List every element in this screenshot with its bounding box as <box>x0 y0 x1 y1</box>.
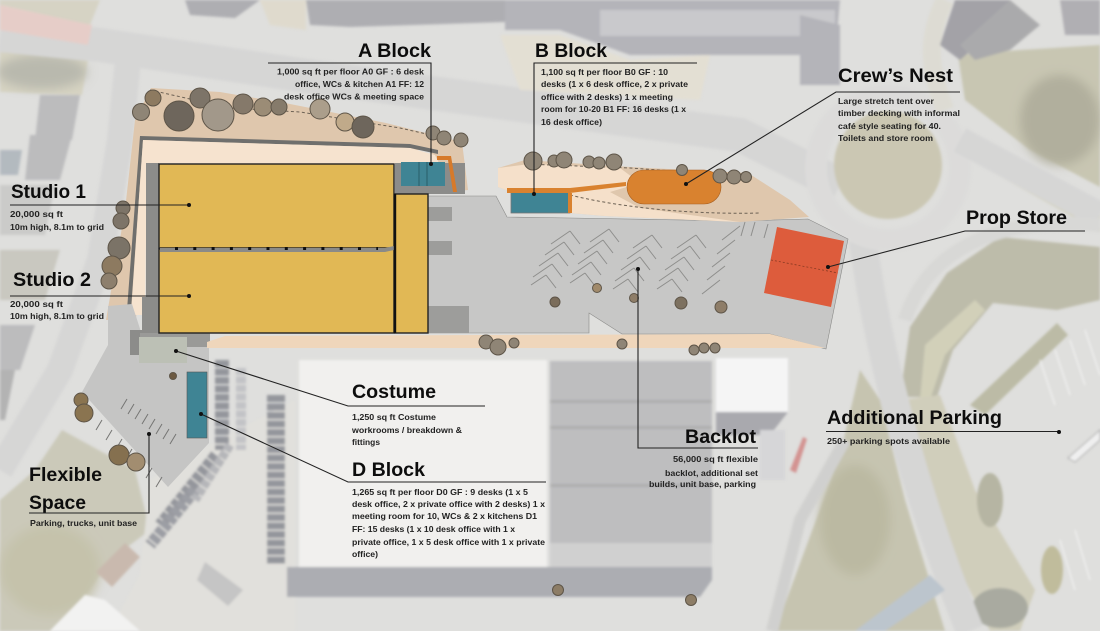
landscape north tan band <box>135 88 468 192</box>
label: Backlot: 56,000 sq ft flexible <box>673 455 758 464</box>
aerial: west car park rows <box>150 360 276 565</box>
aerial: white warehouse <box>299 360 547 567</box>
label: D Block: meeting room for 10, WCs & 2 x kitchens D1 <box>352 512 537 521</box>
label: B Block: B Block <box>535 40 607 62</box>
main yard <box>428 196 848 349</box>
aerial: small buildings south west <box>197 562 243 606</box>
label: A Block <box>268 40 433 166</box>
parking bays backlot <box>531 222 768 294</box>
label: B Block <box>532 40 697 196</box>
site plan <box>74 88 848 606</box>
label: A Block: office, WCs & kitchen A1 FF: 12 <box>295 80 424 89</box>
label: Backlot: backlot, additional set <box>665 469 758 478</box>
label: Studio 2: Studio 2 <box>13 269 91 291</box>
aerial: concrete lots <box>110 400 295 631</box>
label: A Block: 1,000 sq ft per floor A0 GF : 6 desk <box>277 68 424 76</box>
label: B Block: desks (1 x 6 desk office, 2 x private <box>541 80 688 89</box>
Prop Store <box>764 227 844 307</box>
label: Crew's Nest: Toilets and store room <box>838 134 933 143</box>
aerial: sand ground north <box>500 35 710 100</box>
label: Studio 2: 20,000 sq ft <box>10 300 63 309</box>
A block <box>401 156 457 192</box>
label: Backlot <box>636 267 758 489</box>
D block <box>187 372 207 438</box>
label: Crew's Nest: Crew’s Nest <box>838 65 954 87</box>
label: Costume <box>174 349 485 447</box>
label: B Block: office with 2 desks) 1 x meeting <box>541 93 673 102</box>
Crew's Nest tent <box>627 170 721 204</box>
dashed landscape paths <box>150 90 760 213</box>
label: Crew's Nest: café style seating for 40. <box>838 122 941 131</box>
label: Studio 1: 20,000 sq ft <box>10 210 63 219</box>
label: Crew's Nest: Large stretch tent over <box>838 97 935 106</box>
label: B Block: room for 10-20 B1 FF: 16 desks (1 x <box>541 105 686 114</box>
trees <box>74 88 752 606</box>
yard south west <box>82 304 209 487</box>
aerial: roundabout island <box>834 111 942 219</box>
label: Studio 1: 10m high, 8.1m to grid <box>10 223 104 232</box>
aerial: red surfaced road <box>0 5 92 45</box>
landscape west tan strip <box>106 120 146 320</box>
label: Studio 2 <box>10 269 191 321</box>
aerial: building shadow <box>287 567 712 597</box>
bottom tan strip <box>207 334 825 348</box>
grey service strips <box>130 163 469 355</box>
label: Costume: fittings <box>352 438 380 447</box>
aerial: housing north <box>185 0 1100 85</box>
studio dividing wall <box>160 246 394 252</box>
studio annex <box>395 194 428 333</box>
B block landscape <box>498 160 809 222</box>
B block light paving <box>498 164 740 222</box>
Studio 1 building <box>159 164 394 248</box>
label: D Block: office) <box>352 550 378 559</box>
label: Studio 1: Studio 1 <box>11 181 86 203</box>
B block <box>507 182 626 213</box>
label: Studio 1 <box>10 181 191 232</box>
label: A Block: A Block <box>358 40 431 62</box>
label: Costume: workrooms / breakdown & <box>351 426 462 435</box>
label: D Block <box>199 412 546 559</box>
label: D Block: D Block <box>352 459 425 481</box>
Costume building <box>139 337 187 363</box>
label: Crew's Nest <box>684 65 960 186</box>
aerial: grey warehouse <box>550 361 712 570</box>
label: D Block: FF: 15 desks (1 x 10 desk office with 1 x <box>352 525 515 534</box>
label: Crew's Nest: timber decking with informal <box>838 109 960 118</box>
parking bays flexible space <box>96 399 176 487</box>
label: Backlot: Backlot <box>685 426 756 448</box>
label: Flexible Space <box>29 432 151 528</box>
label: Prop Store <box>826 207 1085 269</box>
label: Prop Store: Prop Store <box>966 207 1067 229</box>
label: Costume: Costume <box>352 381 436 403</box>
label: Flexible Space: Space <box>29 492 86 514</box>
label: A Block: desk office WCs & meeting space <box>284 92 424 102</box>
aerial: small white building <box>716 358 788 412</box>
label: Flexible Space: Flexible <box>29 464 102 486</box>
label: Flexible Space: Parking, trucks, unit base <box>30 519 137 528</box>
Studio 2 building <box>159 249 394 333</box>
label: Additional Parking <box>826 407 1061 446</box>
access road dark strip <box>127 136 438 310</box>
label: B Block: 16 desk office) <box>541 118 602 127</box>
aerial: housing west <box>0 95 80 420</box>
label: Costume: 1,250 sq ft Costume <box>352 413 436 422</box>
label: Additional Parking: Additional Parking <box>827 407 1002 429</box>
label: D Block: desk office, 2 x private office with 2 desks) 1 x <box>352 500 545 509</box>
label: Additional Parking: 250+ parking spots available <box>827 437 950 446</box>
label: Backlot: builds, unit base, parking <box>649 480 756 489</box>
aerial: east parking marks <box>1040 330 1100 590</box>
label: D Block: private office, 1 x 5 desk office with 1 x private <box>352 538 545 547</box>
label: Studio 2: 10m high, 8.1m to grid <box>10 312 104 321</box>
light paved area <box>131 140 440 315</box>
label: B Block: 1,100 sq ft per floor B0 GF : 10 <box>541 68 668 77</box>
label: D Block: 1,265 sq ft per floor D0 GF : 9 desks (1 x 5 <box>352 488 528 497</box>
